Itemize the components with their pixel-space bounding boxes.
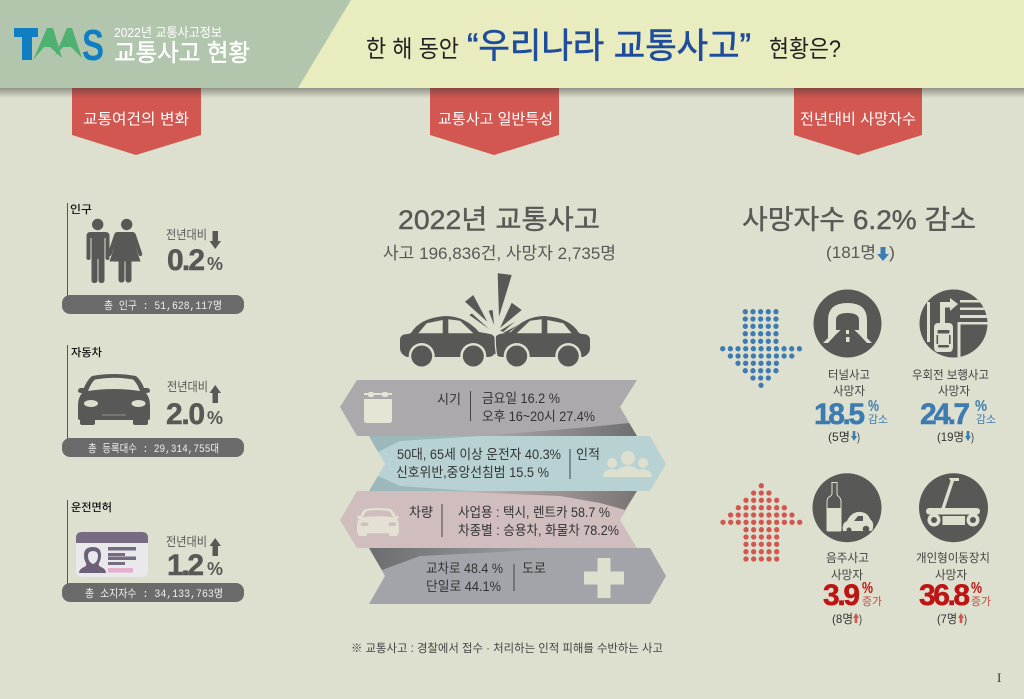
total pill: 총 등록대수 : 29,314,755대	[88, 442, 219, 456]
label: 운전면허: 운전면허	[71, 501, 112, 514]
total pill	[62, 295, 244, 314]
text: 개인형이동장치: 증가	[971, 595, 991, 608]
icon: calendar	[364, 392, 392, 423]
text: 개인형이동장치: )	[964, 612, 967, 626]
text: 터널사고: 18.5	[814, 398, 865, 431]
text: 개인형이동장치: 36.8	[919, 579, 970, 612]
right heading: (181명	[826, 243, 876, 262]
text: 음주사고: 3.9	[823, 579, 860, 612]
text: 터널사고: )	[857, 430, 860, 444]
text: 음주사고: 음주사고	[826, 551, 869, 565]
icon: personal mobility scooter	[919, 473, 988, 542]
band: 시기: 금요일 16.2 %	[482, 391, 560, 406]
total pill: 총 소지자수 : 34,133,763명	[85, 587, 223, 601]
ribbon: 교통여건의 변화	[72, 88, 201, 155]
text: 음주사고: %	[862, 580, 873, 597]
band: 차량: 차종별 : 승용차, 화물차 78.2%	[458, 523, 619, 538]
icon: car	[357, 508, 399, 536]
text: 우회전 보행사고: %	[975, 398, 987, 415]
band: 인적	[369, 436, 666, 491]
headline: “우리나라 교통사고”	[467, 27, 751, 66]
panel: 운전면허	[62, 500, 244, 602]
icon: crossroad	[584, 558, 624, 598]
band: 인적: 신호위반,중앙선침범 15.5 %	[396, 465, 549, 480]
stat: 0.2%	[166, 228, 223, 277]
text: 터널사고: (5명	[828, 430, 850, 444]
text: 우회전 보행사고: 우회전 보행사고	[912, 367, 989, 382]
band: 도로: 도로	[522, 561, 546, 576]
text: 터널사고: 감소	[868, 413, 888, 426]
icon: two cars crashing	[400, 273, 590, 369]
band: 도로: 교차로 48.4 %	[426, 561, 503, 576]
footnote: ※ 교통사고 : 경찰에서 접수 · 처리하는 인적 피해를 수반하는 사고	[351, 641, 663, 655]
text: 우회전 보행사고: )	[971, 430, 974, 444]
stat: 1.2%	[166, 535, 223, 582]
header title: 교통사고 현황	[114, 40, 250, 67]
text: 개인형이동장치: (7명	[937, 612, 957, 626]
band: 차량: 사업용 : 택시, 렌트카 58.7 %	[458, 505, 610, 520]
ribbon: 전년대비 사망자수: 전년대비 사망자수	[800, 111, 916, 128]
text: 터널사고	[814, 368, 888, 444]
band: 차량: 차량	[409, 505, 433, 520]
icon: people	[603, 451, 652, 477]
logo: TAAS	[14, 21, 104, 70]
right heading	[742, 205, 976, 262]
icon: right turn	[920, 290, 990, 362]
band: 도로: 단일로 44.1%	[426, 579, 501, 594]
panel: 인구	[62, 203, 244, 314]
band: 시기: 시기	[437, 392, 461, 407]
panel: 자동차	[62, 345, 244, 457]
text: 개인형이동장치	[916, 551, 991, 626]
center heading	[383, 205, 616, 263]
center heading: 2022년 교통사고	[398, 205, 600, 235]
text: 음주사고: 사망자	[831, 568, 863, 582]
text: 개인형이동장치: %	[971, 580, 982, 597]
band: 시기: 오후 16~20시 27.4%	[482, 409, 595, 424]
stat: 0.2%: 0.2	[167, 244, 205, 277]
headline	[366, 27, 841, 66]
text: 음주사고	[823, 551, 882, 626]
dotted arrow: up	[723, 486, 800, 559]
logo: TAAS: S	[82, 21, 104, 70]
stat: 0.2%: 전년대비	[166, 228, 207, 242]
text: 터널사고: 터널사고	[828, 368, 870, 382]
text: 우회전 보행사고: 사망자	[938, 384, 970, 398]
band: 도로	[369, 548, 666, 604]
band: 시기	[340, 380, 637, 436]
text: 음주사고: (8명	[832, 612, 853, 626]
icon: car front	[78, 374, 150, 425]
text: 우회전 보행사고: 감소	[976, 413, 996, 426]
text: 개인형이동장치: 사망자	[935, 568, 967, 582]
right heading: )	[889, 244, 895, 262]
header band	[0, 0, 1024, 88]
stat: 0.2%: %	[207, 254, 223, 274]
total pill: 총 인구 : 51,628,117명	[104, 299, 222, 313]
stat: 2.0%	[166, 380, 223, 431]
ribbon: 전년대비 사망자수	[794, 88, 922, 155]
band: 인적: 50대, 65세 이상 운전자 40.3%	[397, 447, 561, 462]
text: 음주사고: )	[859, 612, 862, 626]
stat: 1.2%: %	[207, 559, 223, 579]
band: 인적: 인적	[576, 447, 600, 462]
total pill	[62, 583, 244, 602]
stat: 1.2%: 전년대비	[166, 535, 207, 549]
label: 인구: 인구	[70, 203, 92, 216]
text: 터널사고: %	[868, 398, 879, 415]
dotted arrow: down	[723, 312, 800, 385]
stat: 2.0%: %	[207, 408, 223, 428]
ribbon: 교통사고 일반특성	[430, 88, 559, 155]
text: 개인형이동장치: 개인형이동장치	[916, 551, 990, 565]
ribbon: 교통여건의 변화: 교통여건의 변화	[83, 111, 189, 128]
page number: I	[997, 670, 1001, 685]
ribbon: 교통사고 일반특성: 교통사고 일반특성	[438, 111, 553, 128]
headline: 한 해 동안	[366, 36, 459, 63]
band: 차량	[340, 491, 637, 548]
stat: 2.0%: 전년대비	[167, 380, 208, 394]
headline: 현황은?	[769, 36, 841, 63]
icon: driver license	[76, 532, 148, 577]
icon: tunnel	[814, 290, 882, 358]
right heading: 사망자수 6.2% 감소	[742, 205, 976, 235]
center heading: 사고 196,836건, 사망자 2,735명	[383, 244, 616, 263]
total pill	[62, 438, 244, 457]
stat: 2.0%: 2.0	[166, 398, 205, 431]
label: 자동차: 자동차	[71, 346, 102, 359]
text: 우회전 보행사고	[912, 367, 996, 444]
stat: 1.2%: 1.2	[167, 549, 204, 582]
text: 터널사고: 사망자	[833, 384, 865, 398]
header subtitle: 2022년 교통사고정보	[114, 25, 222, 40]
text: 우회전 보행사고: (19명	[937, 430, 964, 444]
icon: drunk driving	[812, 473, 882, 542]
icon: man and woman	[86, 219, 142, 283]
text: 우회전 보행사고: 24.7	[920, 398, 970, 431]
text: 음주사고: 증가	[862, 595, 882, 608]
